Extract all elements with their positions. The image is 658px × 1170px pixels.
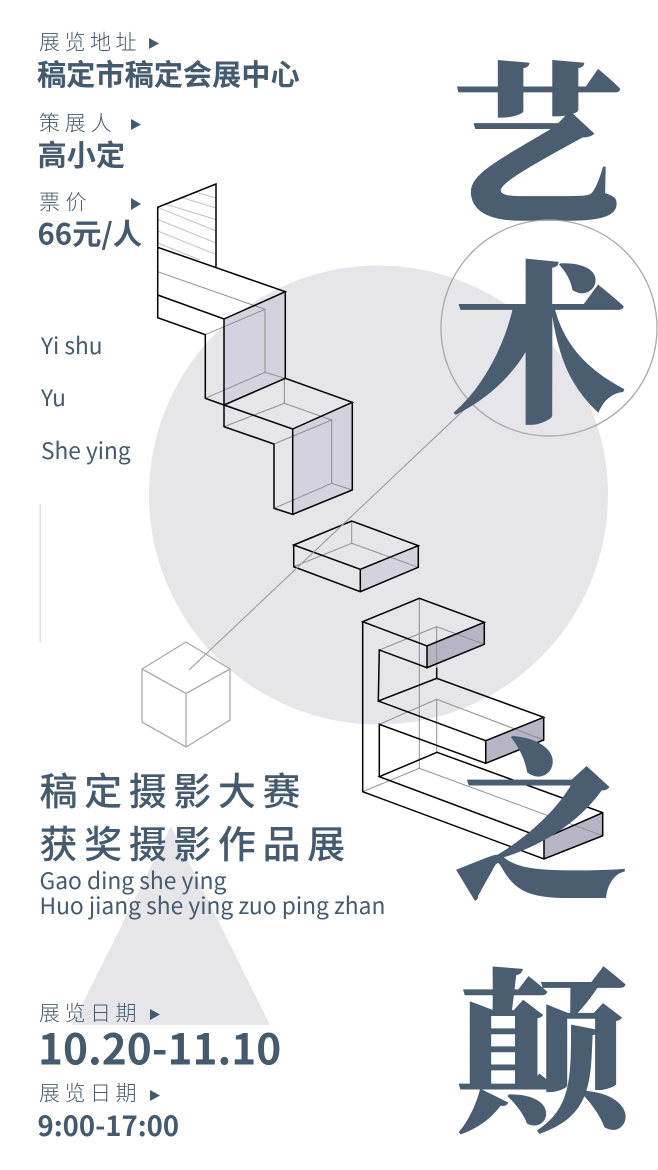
exhibition heading: 稿定摄影大赛 <box>40 761 307 816</box>
big title character 之: 之 <box>454 730 628 923</box>
background large circle <box>149 266 608 724</box>
diagonal connector line <box>189 408 466 670</box>
pinyin title: She ying <box>41 433 131 466</box>
isometric letter: middle flat box <box>294 521 418 592</box>
background triangle <box>72 826 270 1025</box>
ticket label <box>39 186 141 216</box>
ticket value: 66元/人 <box>38 212 142 254</box>
pinyin title <box>40 328 131 466</box>
decorative vertical line <box>40 504 41 642</box>
thin outline circle <box>441 220 657 436</box>
exhibition heading <box>40 761 352 869</box>
exhibition heading pinyin: Gao ding she ying <box>40 863 227 896</box>
big title character 艺: 艺 <box>451 54 625 247</box>
isometric letter: lower E form <box>363 598 603 859</box>
big title character 术: 术 <box>452 253 626 446</box>
address label: 展览地址 <box>39 26 141 56</box>
time value: 9:00-17:00 <box>38 1104 179 1144</box>
exhibition heading: 获奖摄影作品展 <box>40 814 352 869</box>
pinyin title: Yu <box>40 380 66 413</box>
date value: 10.20-11.10 <box>38 1016 281 1078</box>
ticket label: 票价 <box>39 186 92 216</box>
wireframe cube <box>142 642 230 747</box>
date label: 展览日期 <box>39 998 141 1028</box>
curator value: 高小定 <box>38 132 125 174</box>
pinyin title: Yi shu <box>40 328 103 361</box>
time label: 展览日期 <box>39 1078 141 1108</box>
exhibition heading pinyin: Huo jiang she ying zuo ping zhan <box>40 888 385 921</box>
curator label: 策展人 <box>39 108 116 138</box>
exhibition heading pinyin <box>40 863 385 921</box>
big title character 颠: 颠 <box>455 961 643 1154</box>
isometric letter: upper stepped form <box>158 184 352 514</box>
address value: 稿定市稿定会展中心 <box>37 52 300 94</box>
